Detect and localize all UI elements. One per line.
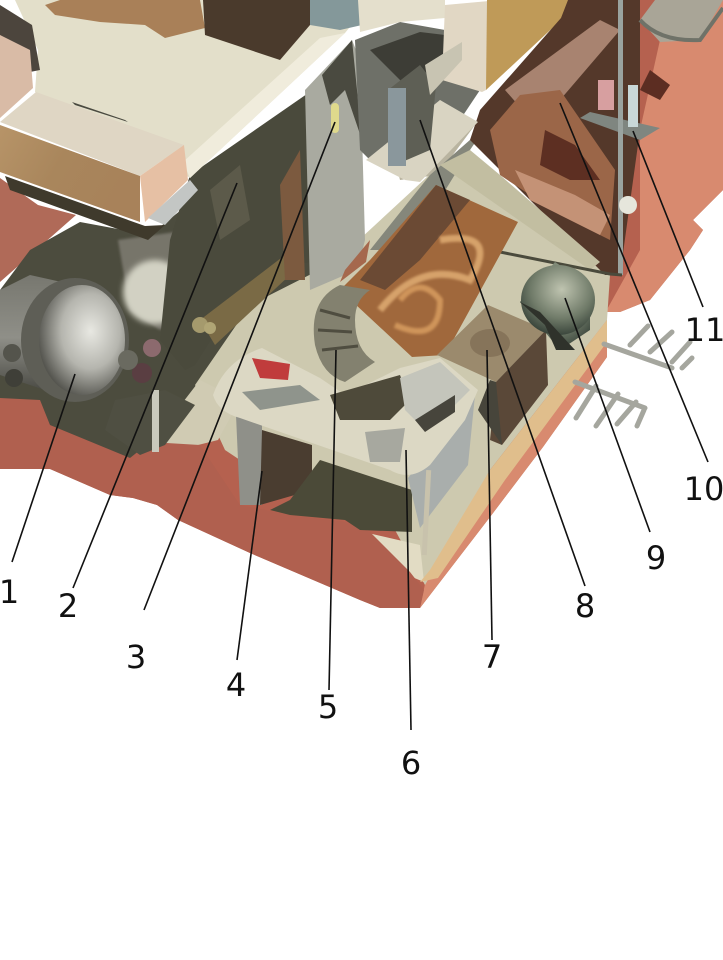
- number labels: 6: [401, 744, 421, 782]
- panel: concrete pillar: [305, 40, 370, 290]
- panel: upper floor: [0, 0, 372, 178]
- icon: curved striped object: [314, 285, 375, 382]
- leader lines: [12, 103, 708, 730]
- panel: arched recess: [355, 22, 487, 250]
- panel: front earth band: [0, 398, 424, 608]
- icon: floating shelf machine: [366, 42, 478, 182]
- number labels: 2: [58, 587, 78, 625]
- icon: grey rake racks: [575, 326, 692, 426]
- number labels: 5: [318, 688, 338, 726]
- panel: workbench: [213, 348, 478, 555]
- number labels: 4: [226, 666, 246, 704]
- panel: storage wall shelves: [160, 78, 330, 370]
- icon: tank: [0, 275, 195, 455]
- number labels: [0, 311, 723, 782]
- number labels: 8: [575, 587, 595, 625]
- panel: stone block: [0, 92, 198, 240]
- icon: green machine: [520, 262, 595, 350]
- icon: patterned box: [437, 305, 548, 445]
- panel: carpet: [340, 185, 518, 357]
- number labels: 7: [482, 638, 502, 676]
- number labels: 9: [646, 539, 666, 577]
- panel: upper right stonework: [358, 0, 640, 275]
- icon: baseboard strip: [420, 320, 607, 582]
- icon: right wall pole and round shelf: [490, 0, 723, 275]
- panel: rear floor and rooms: [140, 165, 610, 585]
- panel: basement cavity: [0, 90, 335, 458]
- panel: earth base: [0, 0, 723, 608]
- number labels: 3: [126, 638, 146, 676]
